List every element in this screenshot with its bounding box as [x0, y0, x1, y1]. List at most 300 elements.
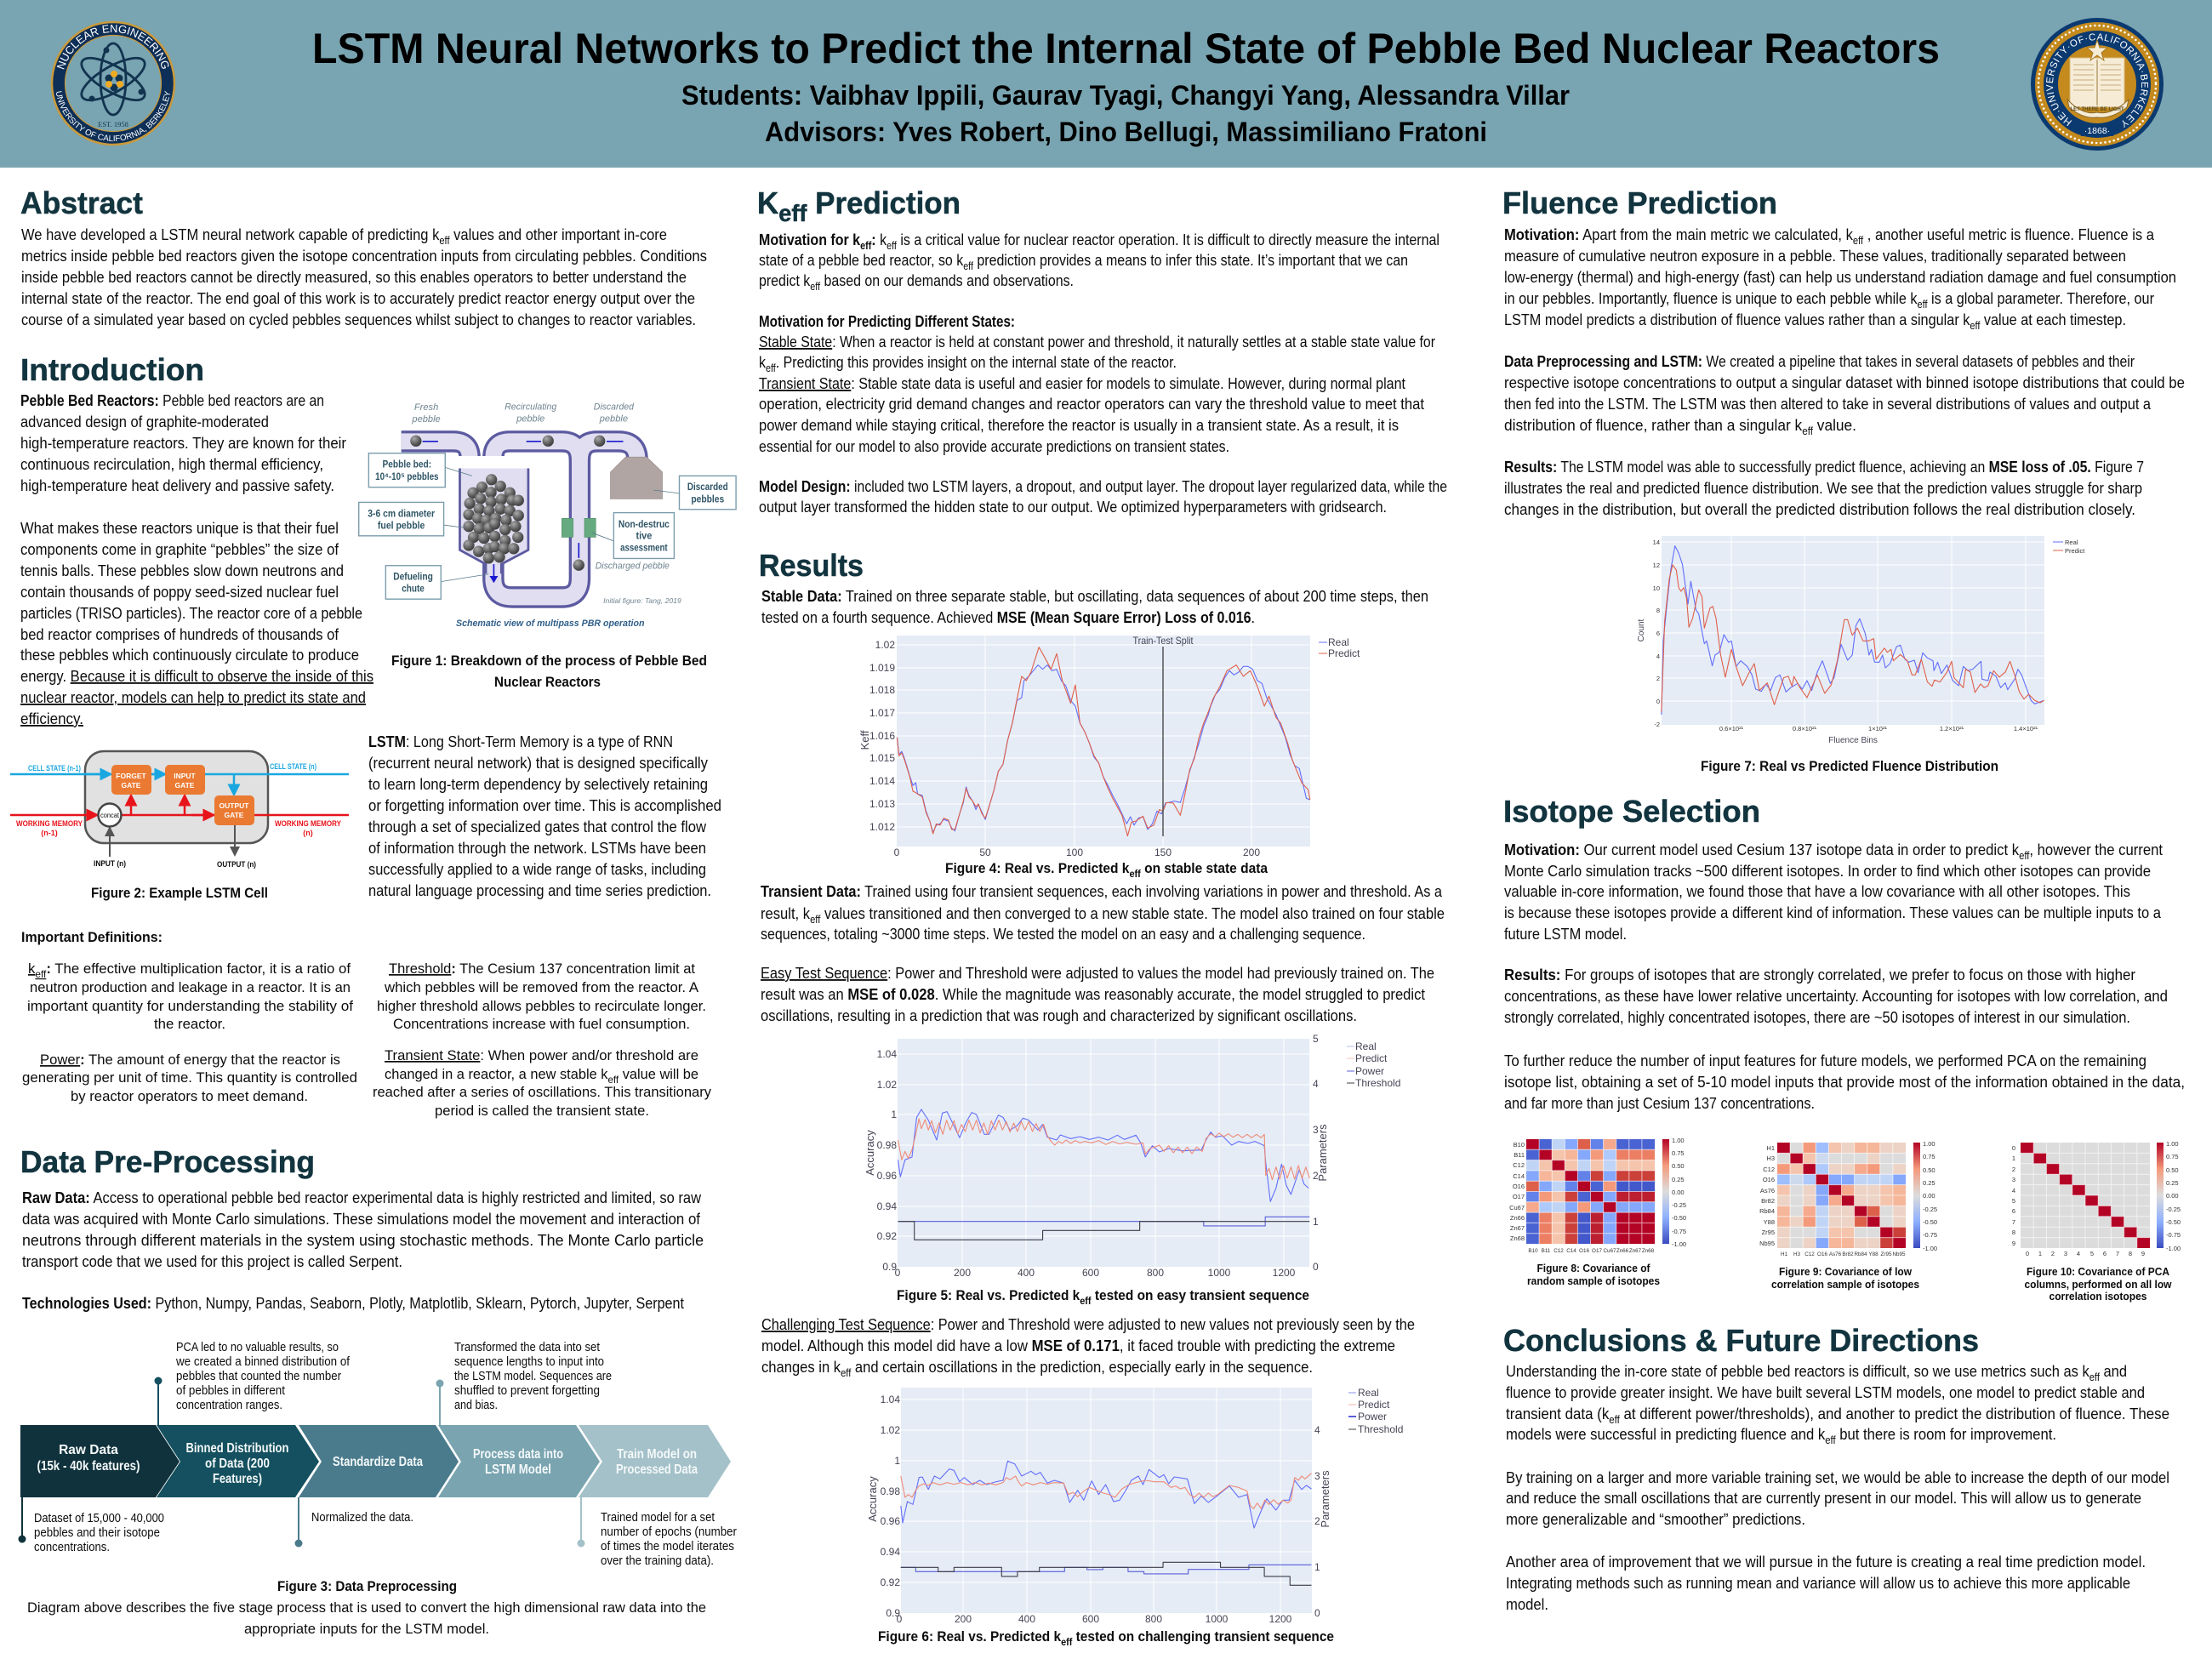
- text block: motivation: eff: [887, 240, 897, 252]
- definition: transient state: reached after a series of oscillations. This transitionary: [373, 1084, 711, 1100]
- chart: figure 5 easy transient sequence: 0.98: [877, 1139, 897, 1151]
- figure 2: LSTM cell diagram: OUTPUT (n): [217, 860, 256, 869]
- text block: pebble bed reactors: particles (TRISO particles). The reactor core of a pebble: [20, 604, 362, 622]
- figure 1: pebble bed reactor schematic: pebble: [516, 414, 544, 425]
- chart: figure 10 PCA covariance heatmap: -0.25: [2166, 1206, 2181, 1213]
- chart: figure 9 covariance heatmap: Rb84: [1854, 1251, 1867, 1257]
- figure 1: pebble bed reactor schematic: Discarded: [594, 402, 635, 413]
- figure 2: LSTM cell diagram: INPUT (n): [94, 859, 126, 868]
- text block: conclusions summary: eff: [2089, 1371, 2100, 1383]
- text block: LSTM: through a set of specialized gates that control the flow: [368, 818, 707, 835]
- heading: keff prediction: Prediction: [807, 185, 961, 220]
- chart: figure 9 covariance heatmap: H3: [1766, 1154, 1775, 1162]
- figure 1: pebble bed reactor schematic: Schematic view of multipass PBR operation: [456, 619, 645, 629]
- chart: figure 6 challenging transient sequence: Power: [1358, 1411, 1387, 1422]
- text block: pebble bed reactors: Pebble Bed Reactors: Pebble bed reactors are an: [20, 391, 324, 409]
- text block: pebble bed reactors: continuous recirculation, high thermal efficiency,: [20, 455, 323, 473]
- chart: figure 5 easy transient sequence: 0: [895, 1267, 901, 1279]
- icon: nuclear engineering logo: NUCLEAR ENGINEERING: [56, 25, 168, 70]
- callout: dataset: [19, 1497, 164, 1554]
- text block: pebble bed reactors: bed reactor comprises of hundreds of thousands of: [20, 625, 339, 643]
- text block: fluence motivation: Motivation: Apart from the main metric we calculated, k: [1504, 225, 1884, 243]
- chart: figure 5 easy transient sequence: 5: [1313, 1033, 1319, 1045]
- chart: figure 8 covariance heatmap: Zn67: [1510, 1224, 1525, 1232]
- text block: LSTM: of information through the network. LSTMs have been: [368, 839, 706, 857]
- figure 2: LSTM cell diagram: WORKING MEMORY: [16, 819, 83, 828]
- text block: fluence motivation: eff: [1853, 235, 1864, 247]
- chart: figure 10 PCA covariance heatmap: 9: [2141, 1250, 2145, 1257]
- chart: figure 4 real vs predicted keff stable: [858, 635, 1360, 858]
- chart: figure 9 covariance heatmap: As76: [1760, 1187, 1775, 1194]
- figure 2: LSTM cell diagram: CELL STATE (n): [270, 762, 316, 771]
- chart: figure 6 challenging transient sequence: 200: [955, 1613, 972, 1625]
- text block: LSTM: or forgetting information over time. This is accomplished: [368, 796, 721, 814]
- chart: figure 6 challenging transient sequence: 4: [1314, 1424, 1320, 1436]
- figure 10 caption: correlation isotopes: [2049, 1291, 2147, 1303]
- text block: fluence motivation: , another useful metric is fluence. Fluence is a: [1863, 225, 2155, 243]
- text block: challenging test sequence: changes in k: [761, 1358, 850, 1376]
- callout: PCA: we created a binned distribution of: [175, 1355, 351, 1369]
- text block: isotope motivation: Monte Carlo simulation tracks ~500 different isotopes. In order to find which other isotopes can provide: [1504, 862, 2151, 880]
- callout: dataset: pebbles and their isotope: [34, 1526, 160, 1540]
- text block: motivation: based on our demands and observations.: [820, 271, 1074, 289]
- figure 1: pebble bed reactor schematic: Initial figure: Tang, 2019: [603, 596, 681, 605]
- chart: figure 5 easy transient sequence: 0.96: [877, 1170, 897, 1182]
- definition: threshold: Concentrations increase with fuel consumption.: [393, 1016, 690, 1032]
- chart: figure 9 covariance heatmap: Y88: [1868, 1251, 1878, 1257]
- chart: figure 5 easy transient sequence: 400: [1018, 1267, 1035, 1279]
- chart: figure 7 fluence distribution: 6: [1656, 630, 1660, 637]
- text block: training improvements: [1506, 1468, 2169, 1528]
- chart: figure 8 covariance heatmap: B10: [1514, 1141, 1525, 1149]
- chart: figure 5 easy transient sequence: 1.04: [877, 1048, 897, 1060]
- text block: stable data: Stable Data: Trained on three separate stable, but oscillating, data sequences of about 200 time steps, then: [761, 587, 1428, 605]
- text block: motivation: k: [881, 231, 888, 248]
- chart: figure 9 covariance heatmap: -0.50: [1923, 1218, 1937, 1226]
- chart: figure 6 challenging transient sequence: 1: [1314, 1561, 1320, 1573]
- chart: figure 9 covariance heatmap: -1.00: [1923, 1245, 1937, 1252]
- text block: training improvements: and reduce the small oscillations that are currently present in our model. This will allow us to generate: [1506, 1489, 2141, 1507]
- text block: fluence motivation: eff: [1970, 320, 1981, 332]
- figure 1: pebble bed reactor schematic: assessment: [620, 543, 668, 554]
- text block: LSTM: successfully applied to a wide range of tasks, including: [368, 860, 706, 878]
- chart: figure 9 covariance heatmap: 1.00: [1923, 1140, 1936, 1148]
- text block: pebble bed reactors: efficiency.: [20, 710, 83, 727]
- heading: keff prediction: eff: [778, 200, 807, 226]
- chart: figure 8 covariance heatmap: O17: [1592, 1248, 1602, 1254]
- text block: isotope motivation: eff: [2019, 850, 2030, 862]
- text block: training improvements: more generalizable and “smoother” predictions.: [1506, 1510, 1805, 1528]
- chart: figure 6 challenging transient sequence: 800: [1145, 1613, 1162, 1625]
- text block: pebble bed reactors: nuclear reactor, models can help to predict its state and: [20, 688, 366, 706]
- chart: figure 8 covariance heatmap: Zn68: [1642, 1248, 1655, 1254]
- text block: easy test sequence: result was an MSE of 0.028. While the magnitude was reasonably accurate, the model struggled to predict: [761, 985, 1425, 1003]
- text block: isotope motivation: valuable in-core information, we found those that have a low covariance with all other isotopes. This: [1504, 882, 2130, 900]
- text block: motivation: prediction provides a means to infer this state. It’s important that we can: [973, 251, 1408, 269]
- figure 3: chevron process diagram: [19, 1341, 737, 1568]
- figure 2: LSTM cell diagram: concat: [100, 812, 120, 819]
- chart: figure 7 fluence distribution: 0.8×10²¹: [1793, 725, 1817, 733]
- chart: figure 8 covariance heatmap: B11: [1514, 1151, 1525, 1159]
- chart: figure 8 covariance heatmap: -0.50: [1672, 1214, 1686, 1222]
- chart: figure 6 challenging transient sequence: 1.04: [881, 1394, 900, 1405]
- figure 1: pebble bed reactor schematic: 10⁴-10⁵ pebbles: [375, 471, 439, 482]
- step 4: process data: Process data into: [473, 1447, 563, 1462]
- text block: pebble bed reactors: energy. Because it is difficult to observe the inside of this: [20, 667, 373, 685]
- chart: figure 6 challenging transient sequence: [866, 1387, 1403, 1625]
- chart: figure 8 covariance heatmap: Zn66: [1510, 1214, 1525, 1222]
- chart: figure 6 challenging transient sequence: 0.94: [881, 1546, 900, 1558]
- figure 4 caption: eff: [1129, 868, 1142, 880]
- figure 10 caption: [2025, 1266, 2172, 1303]
- figure 10 caption: columns, performed on all low: [2025, 1279, 2172, 1291]
- chart: figure 8 covariance heatmap: C14: [1513, 1172, 1525, 1180]
- callout: sequences: and bias.: [454, 1399, 498, 1412]
- figure 2: LSTM cell diagram: GATE: [122, 781, 141, 790]
- text block: fluence motivation: value at each timestep.: [1980, 311, 2126, 328]
- figure 3 caption: appropriate inputs for the LSTM model.: [244, 1621, 489, 1637]
- text block: motivation: is a critical value for nuclear reactor operation. It is difficult to directly measure the internal: [897, 231, 1440, 248]
- text block: different states: . Predicting this provides insight on the internal state of the reactor.: [776, 353, 1177, 371]
- text block: LSTM: to learn long-term dependency by selectively retaining: [368, 775, 708, 793]
- chart: figure 5 easy transient sequence: 0: [1313, 1261, 1319, 1273]
- step 1: raw data: Raw Data: [59, 1443, 118, 1457]
- text block: isotope motivation: , however the current: [2029, 841, 2163, 858]
- text block: isotope results: [1504, 966, 2168, 1026]
- text block: fluence results: changes in the distribution, but overall the predicted distribution follows the real distribution closely.: [1504, 500, 2135, 518]
- text block: abstract: internal state of the reactor. The end goal of this work is to accurately predict reactor energy output over the: [21, 289, 695, 307]
- text block: preprocessing and LSTM: distribution of fluence, rather than a singular k: [1504, 416, 1822, 434]
- chart: figure 5 easy transient sequence: 1: [1313, 1216, 1319, 1228]
- definition: power: [22, 1052, 357, 1104]
- text block: challenging test sequence: model. Although this model did have a low MSE of 0.171, it faced trouble with predicting the extreme: [761, 1337, 1395, 1354]
- step 5: train model: Processed Data: [616, 1462, 698, 1477]
- text block: conclusions summary: fluence to provide greater insight. We have built several LSTM models, one model to predict stable and: [1506, 1383, 2145, 1401]
- chart: figure 9 covariance heatmap: Zr95: [1762, 1229, 1775, 1236]
- chart: figure 4 real vs predicted keff stable: 200: [1243, 847, 1260, 858]
- text block: real time model: Another area of improvement that we will pursue in the future is creating a real time prediction model.: [1506, 1553, 2146, 1571]
- text block: LSTM: natural language processing and time series prediction.: [368, 881, 711, 899]
- definition: threshold: [377, 961, 706, 1032]
- chart: figure 5 easy transient sequence: 2: [1313, 1170, 1319, 1182]
- chart: figure 4 real vs predicted keff stable: 150: [1154, 847, 1172, 858]
- chart: figure 8 covariance heatmap: C12: [1513, 1161, 1525, 1169]
- chart: figure 8 covariance heatmap: [1509, 1137, 1686, 1254]
- chart: figure 8 covariance heatmap: 0.25: [1672, 1176, 1685, 1183]
- callout: sequences: [436, 1341, 612, 1425]
- text block: conclusions summary: eff: [1609, 1414, 1620, 1426]
- figure 4 caption: on stable state data: [1141, 860, 1268, 876]
- definition: keff: k: [28, 961, 47, 980]
- panel: conclusions and future directions: [1503, 1323, 2169, 1613]
- chart: figure 10 PCA covariance heatmap: 0.75: [2166, 1153, 2179, 1160]
- text block: LSTM: (recurrent neural network) that is designed specifically: [368, 754, 709, 772]
- chart: figure 4 real vs predicted keff stable: Train-Test Split: [1133, 635, 1194, 647]
- figure 1: pebble bed reactor schematic: tive: [636, 531, 653, 542]
- chart: figure 10 PCA covariance heatmap: -0.50: [2166, 1218, 2181, 1226]
- text block: different states: Transient State: Stable state data is useful and easier for models to simulate. However, during normal plant: [759, 374, 1405, 392]
- figure 7 caption: Figure 7: Real vs Predicted Fluence Distribution: [1701, 758, 1998, 774]
- figure 8 caption: random sample of isotopes: [1527, 1275, 1660, 1287]
- text block: fluence results: illustrates the real and predicted fluence distribution. We see that the prediction values struggle for sharp: [1504, 479, 2142, 497]
- figure 1: pebble bed reactor schematic: fuel pebble: [378, 520, 425, 531]
- chart: figure 7 fluence distribution: 0: [1656, 698, 1660, 705]
- text block: motivation: Motivation for k: [759, 231, 876, 252]
- chart: figure 6 challenging transient sequence: 0.98: [881, 1485, 900, 1497]
- figure 1 caption: Figure 1: Breakdown of the process of Pebble Bed: [391, 653, 707, 669]
- text block: isotope motivation: Motivation: Our current model used Cesium 137 isotope data in order to predict k: [1504, 841, 2067, 858]
- panel: introduction: [10, 352, 736, 1119]
- step 2: binned distribution: [157, 1425, 319, 1497]
- text block: motivation: predict k: [759, 271, 818, 289]
- heading: abstract: Abstract: [20, 185, 143, 220]
- chart: figure 8 covariance heatmap: 0.75: [1672, 1149, 1685, 1157]
- chart: figure 10 PCA covariance heatmap: 0: [2026, 1250, 2029, 1257]
- text block: motivation: eff: [860, 240, 872, 252]
- pebbles: [463, 474, 524, 564]
- chart: figure 9 covariance heatmap: -0.25: [1923, 1206, 1937, 1213]
- text block: conclusions summary: and: [2100, 1362, 2127, 1380]
- callout: PCA: [155, 1341, 351, 1425]
- panel: results: [759, 548, 1445, 1648]
- definition: keff: neutron production and leakage in a reactor. It is an: [30, 979, 351, 995]
- chart: figure 10 PCA covariance heatmap: 2: [2051, 1250, 2055, 1257]
- chart: figure 8 covariance heatmap: 0.00: [1672, 1189, 1685, 1196]
- title: LSTM Neural Networks to Predict the Internal State of Pebble Bed Nuclear Reactors: [312, 25, 1940, 72]
- chart: figure 10 PCA covariance heatmap: 0.00: [2166, 1192, 2179, 1200]
- definition: threshold: higher threshold allows pebbles to recirculate longer.: [377, 998, 706, 1014]
- chart: figure 8 covariance heatmap: -1.00: [1672, 1240, 1686, 1248]
- chart: figure 6 challenging transient sequence: 0.96: [881, 1515, 900, 1527]
- chart: figure 5 easy transient sequence: [864, 1033, 1400, 1279]
- chart: figure 8 covariance heatmap: B11: [1542, 1248, 1551, 1254]
- chart: figure 9 covariance heatmap: Nb95: [1892, 1251, 1906, 1257]
- text block: isotope motivation: [1504, 841, 2163, 943]
- chart: figure 10 PCA covariance heatmap: 8: [2129, 1250, 2132, 1257]
- chart: figure 5 easy transient sequence: Accuracy: [864, 1130, 876, 1176]
- text block: transient data: sequences, totaling ~3000 time steps. We tested the model on an easy and a challenging sequence.: [761, 925, 1365, 943]
- chart: figure 7 fluence distribution: 2: [1656, 675, 1660, 682]
- text block: different states: essential for our model to also provide accurate predictions on transient states.: [759, 437, 1229, 455]
- text block: fluence motivation: measure of cumulative neutron exposure in a pebble. These values, traditionally separated between: [1504, 247, 2126, 265]
- text block: transient data: eff: [810, 914, 821, 926]
- chart: figure 10 PCA covariance heatmap: -0.75: [2166, 1231, 2181, 1239]
- figure 1: pebble bed reactor schematic: pebbles: [691, 493, 724, 505]
- text block: fluence results: [1504, 458, 2144, 518]
- chart: figure 5 easy transient sequence: Threshold: [1355, 1077, 1400, 1089]
- figure 2: LSTM cell diagram: CELL STATE (n-1): [28, 764, 81, 772]
- text block: fluence motivation: in our pebbles. Importantly, fluence is unique to each pebble while k: [1504, 289, 1975, 307]
- callout: trained: Trained model for a set: [601, 1511, 715, 1525]
- chart: figure 4 real vs predicted keff stable: Keff: [858, 730, 871, 750]
- text block: conclusions summary: [1506, 1362, 2169, 1446]
- chart: figure 8 covariance heatmap: C12: [1554, 1248, 1564, 1254]
- definition: keff: [27, 961, 353, 1032]
- chart: figure 7 fluence distribution: Real: [2065, 539, 2078, 546]
- chart: figure 7 fluence distribution: 1.4×10²¹: [2014, 725, 2038, 733]
- chart: figure 9 covariance heatmap: Br82: [1842, 1251, 1854, 1257]
- text block: isotope motivation: future LSTM model.: [1504, 925, 1627, 943]
- text block: abstract: values and other important in-core: [450, 225, 667, 243]
- definition: transient state: Transient State: When power and/or threshold are: [385, 1047, 698, 1063]
- callout: sequences: sequence lengths to input into: [454, 1355, 604, 1369]
- text block: conclusions summary: eff: [1825, 1434, 1836, 1446]
- chart: figure 9 covariance heatmap: C12: [1763, 1166, 1775, 1173]
- chart: figure 10 PCA covariance heatmap: 9: [2012, 1240, 2015, 1247]
- text block: abstract: eff: [439, 235, 450, 247]
- chart: figure 8 covariance heatmap: -0.25: [1672, 1201, 1686, 1209]
- figure 1: pebble bed reactor schematic: pebble: [411, 414, 441, 425]
- text block: abstract: [21, 225, 707, 328]
- text block: model design: Model Design: included two LSTM layers, a dropout, and output layer. The dropout layer regularized data, while the: [759, 477, 1447, 495]
- step 2: binned distribution: Binned Distribution: [185, 1441, 289, 1456]
- callout: PCA: of pebbles in different: [176, 1384, 285, 1398]
- definition: keff: important quantity for understanding the stability of: [27, 998, 353, 1014]
- chart: figure 4 real vs predicted keff stable: 100: [1066, 847, 1083, 858]
- callout: trained: [577, 1497, 737, 1568]
- figure 2: LSTM cell diagram: (n): [303, 829, 313, 837]
- callout: sequences: the LSTM model. Sequences are: [454, 1370, 612, 1383]
- chart: figure 7 fluence distribution: 0.6×10²¹: [1719, 725, 1744, 733]
- chart: figure 6 challenging transient sequence: Accuracy: [866, 1476, 879, 1522]
- callout: normalized: [294, 1497, 413, 1547]
- text block: transient data: values transitioned and then converged to a new stable state. The model also trained on four stable: [820, 904, 1445, 922]
- chart: figure 4 real vs predicted keff stable: 0: [894, 847, 900, 858]
- text block: model design: [759, 477, 1447, 516]
- figure 2: LSTM cell diagram: WORKING MEMORY: [275, 819, 341, 828]
- callout: sequences: shuffled to prevent forgetting: [454, 1384, 600, 1398]
- chart: figure 8 covariance heatmap: C14: [1566, 1248, 1576, 1254]
- text block: pebble bed reactors: high-temperature reactors. They are known for their: [20, 434, 346, 452]
- figure 8 caption: Figure 8: Covariance of: [1536, 1263, 1650, 1274]
- text block: different states: Stable State: When a reactor is held at constant power and threshold, it naturally settles at a stable state value for: [759, 333, 1435, 351]
- text block: transient data: result, k: [761, 904, 816, 922]
- step 4: process data: LSTM Model: [485, 1462, 551, 1477]
- chart: figure 10 PCA covariance heatmap: 7: [2116, 1250, 2119, 1257]
- callout: dataset: Dataset of 15,000 - 40,000: [34, 1512, 164, 1525]
- definition: keff: the reactor.: [154, 1016, 225, 1032]
- callout: dataset: concentrations.: [34, 1541, 110, 1554]
- heading: results: Results: [759, 548, 864, 583]
- text block: motivation: state of a pebble bed reactor, so k: [759, 251, 996, 269]
- chart: figure 9 covariance heatmap: Y88: [1764, 1218, 1775, 1226]
- text block: abstract: metrics inside pebble bed reactors given the isotope concentration inputs from circulating pebbles. Conditions: [21, 247, 707, 265]
- text block: PCA: and far more than just Cesium 137 concentrations.: [1504, 1094, 1815, 1112]
- figure 2: LSTM cell diagram: GATE: [175, 781, 195, 790]
- chart: figure 8 covariance heatmap: Cu67: [1509, 1204, 1525, 1211]
- chart: figure 10 PCA covariance heatmap: [2012, 1140, 2181, 1257]
- chart: figure 10 PCA covariance heatmap: 7: [2012, 1218, 2015, 1226]
- figure 9 caption: [1771, 1266, 1919, 1291]
- chart: figure 7 fluence distribution: Predict: [2065, 547, 2085, 555]
- chart: figure 10 PCA covariance heatmap: 0: [2012, 1144, 2015, 1152]
- text block: raw data: transport code that we used for this project is called Serpent.: [22, 1252, 402, 1270]
- step 5: train model: Train Model on: [617, 1447, 697, 1462]
- chart: figure 9 covariance heatmap: 0.75: [1923, 1153, 1936, 1160]
- chart: figure 4 real vs predicted keff stable: 50: [979, 847, 991, 858]
- chart: figure 8 covariance heatmap: Zn68: [1510, 1234, 1525, 1242]
- figure 1 caption: Nuclear Reactors: [494, 674, 601, 690]
- chart: figure 7 fluence distribution: 12: [1653, 562, 1660, 569]
- heading: data pre-processing: Data Pre-Processing: [20, 1144, 315, 1179]
- figure 1: pebble bed reactor schematic: Fresh: [414, 402, 438, 413]
- chart: figure 10 PCA covariance heatmap: 8: [2012, 1229, 2015, 1236]
- chart: figure 7 fluence distribution: Count: [1637, 619, 1646, 641]
- text block: challenging test sequence: Challenging Test Sequence: Power and Threshold were adjusted to new values not previously seen by the: [761, 1315, 1415, 1333]
- chart: figure 6 challenging transient sequence: 400: [1018, 1613, 1035, 1625]
- text block: pebble bed reactors: What makes these reactors unique is that their fuel: [20, 519, 339, 537]
- chart: figure 9 covariance heatmap: Nb95: [1759, 1240, 1775, 1247]
- chart: figure 5 easy transient sequence: Predict: [1355, 1052, 1388, 1064]
- figure 2: LSTM cell diagram: INPUT: [174, 772, 197, 780]
- chart: figure 4 real vs predicted keff stable: 1.015: [869, 752, 895, 764]
- chart: figure 6 challenging transient sequence: 0.9: [886, 1607, 900, 1619]
- chart: figure 8 covariance heatmap: -0.75: [1672, 1228, 1686, 1235]
- text block: transient data: [761, 882, 1445, 943]
- text block: LSTM: LSTM: Long Short-Term Memory is a type of RNN: [368, 733, 673, 750]
- text block: conclusions summary: at different power/thresholds), and another to predict the distribution of fluence. These: [1620, 1405, 2169, 1422]
- step 1: raw data: (15k - 40k features): [37, 1459, 140, 1474]
- text block: conclusions summary: transient data (k: [1506, 1405, 1619, 1422]
- text block: motivation: eff: [810, 281, 821, 293]
- figure 1: pebble bed reactor schematic: Discharged pebble: [596, 562, 670, 572]
- text block: easy test sequence: [761, 964, 1434, 1024]
- step 2: binned distribution: Features): [213, 1472, 262, 1486]
- chart: figure 7 fluence distribution: 1×10²¹: [1868, 725, 1887, 733]
- heading: fluence prediction: Fluence Prediction: [1502, 185, 1777, 220]
- text block: raw data: Raw Data: Access to operational pebble bed reactor experimental data is highly restricted and limited, so raw: [22, 1189, 702, 1206]
- text block: stable data: tested on a fourth sequence. Achieved MSE (Mean Square Error) Loss of 0.016.: [761, 608, 1255, 626]
- callout: trained: of times the model iterates: [601, 1540, 734, 1554]
- chart: figure 10 PCA covariance heatmap: 4: [2077, 1250, 2080, 1257]
- chart: figure 7 fluence distribution: Fluence Bins: [1828, 736, 1878, 745]
- chart: figure 9 covariance heatmap: [1759, 1140, 1937, 1257]
- heading: introduction: Introduction: [20, 352, 204, 387]
- figure 5 caption: tested on easy transient sequence: [1092, 1287, 1309, 1303]
- chart: figure 8 covariance heatmap: B10: [1528, 1248, 1538, 1254]
- chart: figure 9 covariance heatmap: As76: [1829, 1251, 1842, 1257]
- definition: transient state: changed in a reactor, a new stable k: [385, 1066, 616, 1082]
- chart: figure 6 challenging transient sequence: 0: [897, 1613, 903, 1625]
- chart: figure 8 covariance heatmap: 1.00: [1672, 1137, 1685, 1144]
- icon: UC Berkeley seal: ·1868·: [2084, 126, 2110, 136]
- panel: keff prediction: [757, 185, 1447, 516]
- heading: isotope selection: Isotope Selection: [1503, 794, 1760, 829]
- chart: figure 9 covariance heatmap: O16: [1763, 1176, 1775, 1183]
- callout: PCA: pebbles that counted the number: [176, 1370, 341, 1383]
- chart: figure 4 real vs predicted keff stable: 1.014: [869, 775, 895, 787]
- text block: motivation: :: [871, 231, 876, 248]
- text block: pebble bed reactors: [20, 391, 373, 727]
- chart: figure 9 covariance heatmap: Br82: [1761, 1197, 1775, 1205]
- chart: figure 10 PCA covariance heatmap: 0.25: [2166, 1179, 2179, 1187]
- chart: figure 4 real vs predicted keff stable: Predict: [1328, 647, 1360, 659]
- text block: fluence results: Results: The LSTM model was able to successfully predict fluence, achieving an MSE loss of .05. Figure 7: [1504, 458, 2144, 476]
- chart: figure 10 PCA covariance heatmap: 3: [2012, 1176, 2015, 1183]
- chart: figure 9 covariance heatmap: H1: [1766, 1144, 1775, 1152]
- text block: abstract: inside pebble bed reactors cannot be directly measured, so this enables operators to better understand the: [21, 268, 687, 286]
- callout: trained: over the training data).: [601, 1554, 714, 1568]
- text block: pebble bed reactors: high-temperature heat delivery and passive safety.: [20, 476, 334, 494]
- callout: sequences: Transformed the data into set: [454, 1341, 600, 1354]
- figure 1: pebble bed reactor schematic: Defueling: [393, 571, 433, 582]
- text block: different states: eff: [766, 362, 776, 374]
- figure 8 caption: [1527, 1263, 1660, 1287]
- chart: figure 9 covariance heatmap: Zr95: [1881, 1251, 1892, 1257]
- icon: UC Berkeley seal: [2031, 18, 2164, 151]
- chart: figure 5 easy transient sequence: Parameters: [1316, 1124, 1329, 1182]
- heading: conclusions: Conclusions & Future Directions: [1503, 1323, 1979, 1358]
